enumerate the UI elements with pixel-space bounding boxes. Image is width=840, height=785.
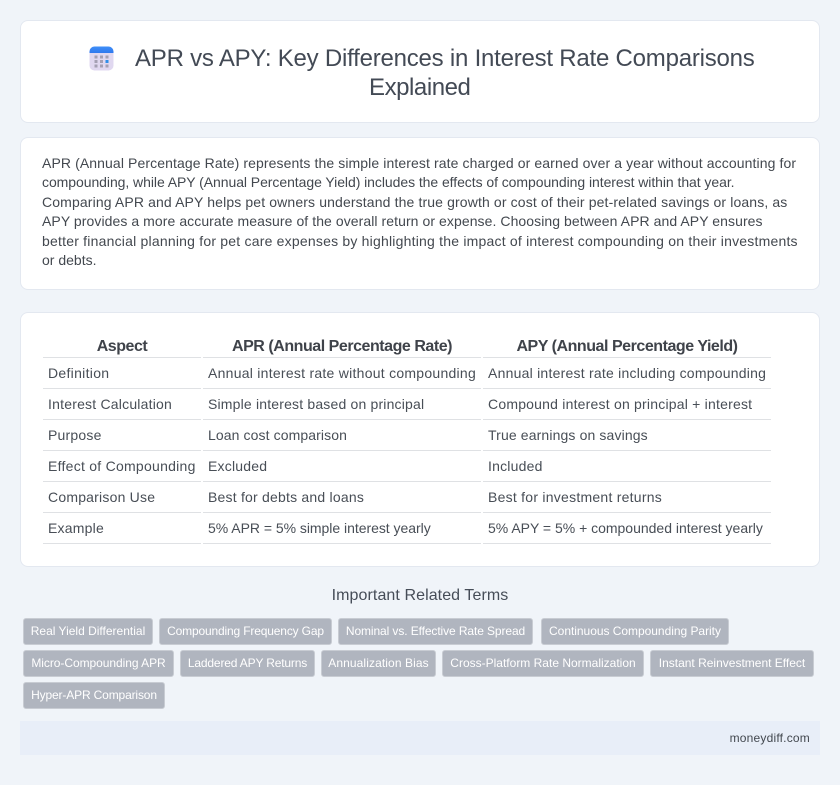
tag: Compounding Frequency Gap [167, 624, 324, 638]
row: purpose: Loan cost comparison [208, 427, 347, 443]
row: example [48, 520, 763, 536]
tag [321, 650, 436, 677]
tag: Hyper-APR Comparison [31, 688, 157, 702]
tag: Continuous Compounding Parity [549, 624, 721, 638]
panel: introduction [20, 137, 820, 290]
panel: comparison table [20, 312, 820, 567]
row: comparison use [48, 489, 662, 505]
row: purpose: True earnings on savings [488, 427, 648, 443]
tag [650, 650, 814, 677]
text: introduction paragraph: APY provides a more accurate measure of the overall return or expense. Choosing between APR and APY ensures [42, 213, 763, 229]
text: introduction paragraph: Comparing APR and APY helps pet owners understand the true growth or cost of their pet-related savings or loans, as [42, 194, 787, 210]
title: Explained [369, 74, 470, 101]
row: interest calculation: Simple interest based on principal [208, 396, 424, 412]
row: comparison use: Best for debts and loans [208, 489, 364, 505]
tag [442, 650, 644, 677]
text: introduction paragraph: APR (Annual Percentage Rate) represents the simple interest rate charged or earned over a year without accounting for [42, 155, 796, 171]
text: source: moneydiff.com [730, 731, 810, 745]
row: interest calculation [48, 396, 752, 412]
row: definition: Definition [48, 365, 109, 381]
row: interest calculation: Compound interest on principal + interest [488, 396, 752, 412]
tag [23, 618, 153, 645]
row: effect of compounding: Excluded [208, 458, 267, 474]
tag: Laddered APY Returns [188, 656, 307, 670]
title [135, 45, 755, 101]
tag [159, 618, 332, 645]
row: effect of compounding: Effect of Compounding [48, 458, 196, 474]
text: introduction paragraph [42, 155, 798, 268]
tag: Annualization Bias [328, 656, 429, 670]
tag [23, 650, 174, 677]
tag: Instant Reinvestment Effect [659, 656, 805, 670]
panel: header [20, 20, 820, 123]
text: introduction paragraph: or debts. [42, 252, 96, 268]
row: purpose: Purpose [48, 427, 102, 443]
tag [23, 682, 165, 709]
table header: Aspect [97, 338, 147, 355]
row: effect of compounding [48, 458, 543, 474]
row: interest calculation: Interest Calculation [48, 396, 172, 412]
row: comparison use: Comparison Use [48, 489, 155, 505]
row: example: Example [48, 520, 104, 536]
heading: important related terms: Important Related Terms [332, 587, 508, 604]
table header: APY (Annual Percentage Yield) [516, 338, 738, 355]
tag [338, 618, 533, 645]
tag [541, 618, 729, 645]
row: effect of compounding: Included [488, 458, 543, 474]
row: example: 5% APY = 5% + compounded interest yearly [488, 520, 763, 536]
tags: related terms [23, 618, 814, 709]
text: introduction paragraph: better financial planning for pet care expenses by highlighting the impact of interest compounding on their investments [42, 233, 798, 249]
row: purpose [48, 427, 648, 443]
title: APR vs APY: Key Differences in Interest Rate Comparisons [135, 45, 755, 72]
row: comparison use: Best for investment returns [488, 489, 662, 505]
row: definition: Annual interest rate without compounding [208, 365, 476, 381]
tag [180, 650, 315, 677]
tag: Cross-Platform Rate Normalization [450, 656, 636, 670]
icon: calendar [90, 46, 114, 70]
tag: Real Yield Differential [31, 624, 145, 638]
table header: APR (Annual Percentage Rate) [232, 338, 452, 355]
tag: Nominal vs. Effective Rate Spread [346, 624, 525, 638]
footer [20, 721, 820, 755]
row: definition [48, 365, 766, 381]
text: introduction paragraph: compounding, while APY (Annual Percentage Yield) includes the effects of compounding interest within that year. [42, 174, 734, 190]
tag: Micro-Compounding APR [31, 656, 166, 670]
table header [97, 338, 738, 355]
row: example: 5% APR = 5% simple interest yearly [208, 520, 431, 536]
row: definition: Annual interest rate including compounding [488, 365, 766, 381]
